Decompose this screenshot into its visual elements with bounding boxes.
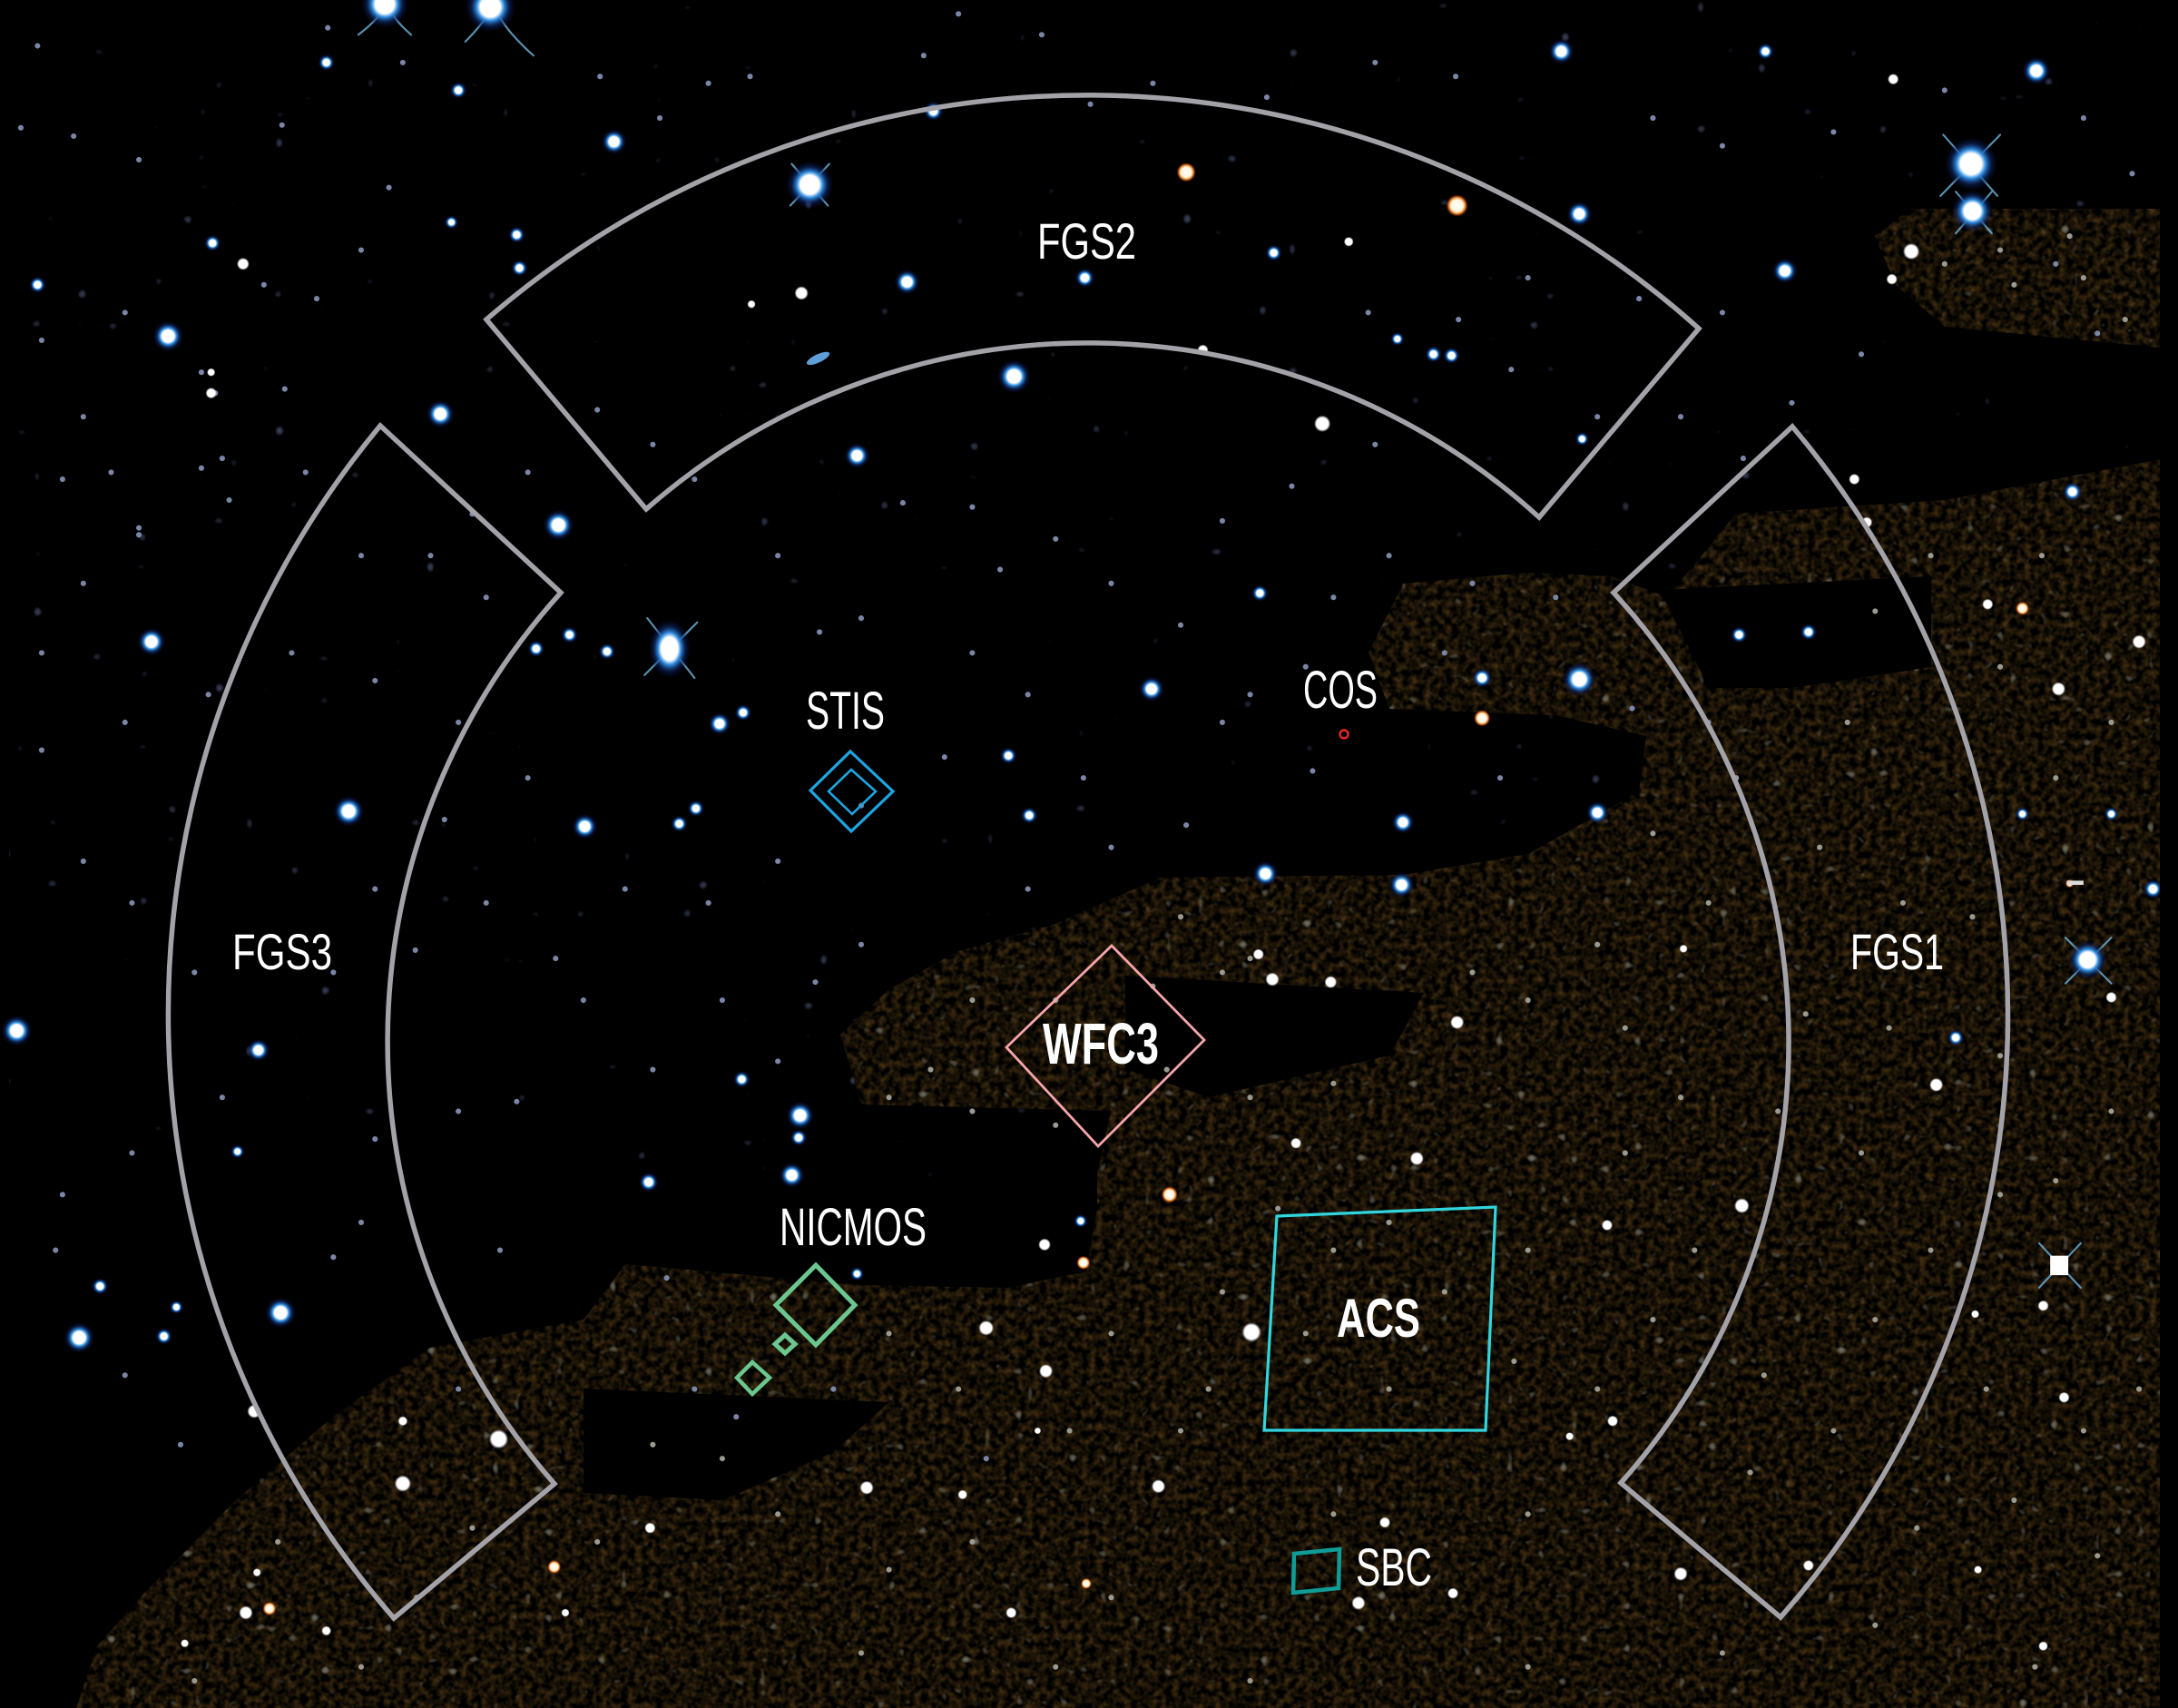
instrument: SBC: SBC [1356,1538,1432,1597]
panel: FGS3 guidance sensor aperture [168,426,561,1618]
bright stars with diffraction spikes [358,0,2112,1288]
background: faint distant sky specks [9,0,2160,1180]
instrument: COS [1303,661,1378,739]
instrument: ACS: ACS [1337,1288,1420,1349]
panel: FGS1 guidance sensor aperture [1614,427,2008,1617]
panel: FGS3 guidance sensor aperture: FGS3 [232,923,332,980]
right edge black strip [2160,0,2178,1708]
instrument: SBC [1293,1538,1432,1597]
instrument: STIS: STIS [806,682,885,741]
panel: FGS1 guidance sensor aperture: FGS1 [1850,923,1944,980]
instrument: WFC3 [1006,946,1204,1146]
instrument: NICMOS: NICMOS [780,1198,927,1257]
grey stars inside the dust [194,236,2139,1681]
instrument: NICMOS [737,1198,927,1394]
instrument: ACS [1264,1207,1496,1430]
instrument: STIS [806,682,893,831]
blue-halo stars [2,39,2163,1353]
orange-tinted stars [262,162,2074,1615]
panel: FGS2 guidance sensor aperture: FGS2 [1037,212,1136,270]
instrument: WFC3: WFC3 [1043,1011,1159,1076]
instrument: COS: COS [1303,661,1378,720]
panel: FGS2 guidance sensor aperture [486,95,1699,517]
